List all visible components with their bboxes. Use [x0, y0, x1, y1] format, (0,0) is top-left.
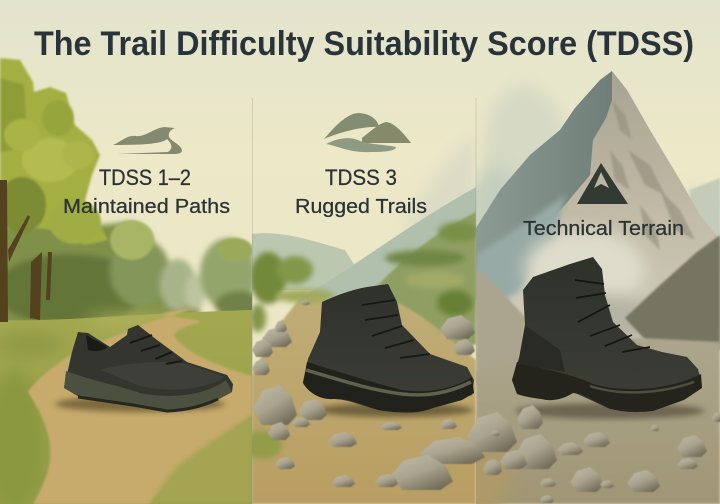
shoe silhouette — [64, 325, 233, 400]
tier label: TDSS 1–2 — [99, 165, 191, 190]
boot silhouette — [303, 284, 474, 412]
bluish lower face — [476, 196, 566, 300]
tier description: Rugged Trails — [295, 196, 427, 218]
scree ground — [476, 338, 720, 504]
column: technical terrain label — [523, 163, 684, 240]
icon: winding path — [113, 127, 182, 154]
misty clouds — [476, 85, 565, 228]
boot shadow — [317, 403, 473, 417]
right bottom grass — [150, 415, 252, 504]
grass shading — [0, 315, 175, 504]
tree foliage — [0, 58, 253, 262]
left rocky slope — [476, 269, 525, 385]
ground blend — [476, 414, 510, 504]
green hillside — [376, 212, 476, 346]
mountain shadow face — [476, 71, 612, 300]
mountaineering boot — [512, 257, 702, 412]
dirt path — [28, 307, 252, 504]
boot silhouette — [512, 257, 702, 410]
rock streaks — [610, 100, 695, 250]
mist at base — [525, 230, 645, 310]
boot laces — [575, 280, 650, 352]
panel: technical terrain scene — [476, 71, 720, 504]
column: TDSS 3 label — [295, 113, 427, 218]
boot shadow — [515, 403, 705, 419]
tier description: Maintained Paths — [63, 196, 230, 218]
trail shoe — [64, 325, 233, 411]
shoe midsole — [64, 371, 232, 410]
panel divider lines — [252, 98, 476, 504]
hiking boot — [303, 284, 474, 413]
title: The Trail Difficulty Suitability Score (TDSS) — [34, 25, 694, 63]
misty backdrop — [410, 144, 476, 226]
tier label: TDSS 3 — [325, 165, 397, 190]
boot sole — [303, 362, 474, 413]
shoe laces — [130, 335, 182, 364]
upper grass patch — [275, 289, 335, 303]
rocky dirt ground — [252, 298, 476, 504]
grass field — [0, 310, 252, 504]
right dark ridge — [625, 235, 720, 350]
lower left grass — [242, 431, 282, 459]
icon: rugged hills — [324, 113, 411, 152]
icon: mountain peak — [577, 163, 628, 204]
mountain — [476, 71, 720, 345]
far right ridge — [690, 178, 720, 238]
distant tree line — [0, 222, 265, 326]
boot sole stripe — [590, 382, 694, 392]
distant misty ridges — [252, 187, 476, 300]
column: TDSS 1-2 label — [63, 127, 230, 218]
boot laces — [362, 300, 430, 358]
tier description: Technical Terrain — [523, 218, 684, 240]
large tree — [0, 58, 253, 322]
shoe shadow — [55, 396, 225, 412]
mountain body — [476, 71, 720, 345]
boot sole — [512, 362, 702, 412]
rocks — [252, 300, 720, 503]
green shrubs — [250, 222, 478, 332]
shoe collar — [86, 335, 108, 351]
boot sole stripe — [306, 370, 471, 395]
panel: rugged trails scene — [242, 130, 478, 504]
panel: maintained paths scene — [0, 58, 265, 504]
boot heel shade — [518, 325, 565, 372]
tree trunks — [0, 180, 52, 322]
shoe upper highlight — [100, 362, 225, 390]
shoe outsole — [78, 397, 218, 411]
